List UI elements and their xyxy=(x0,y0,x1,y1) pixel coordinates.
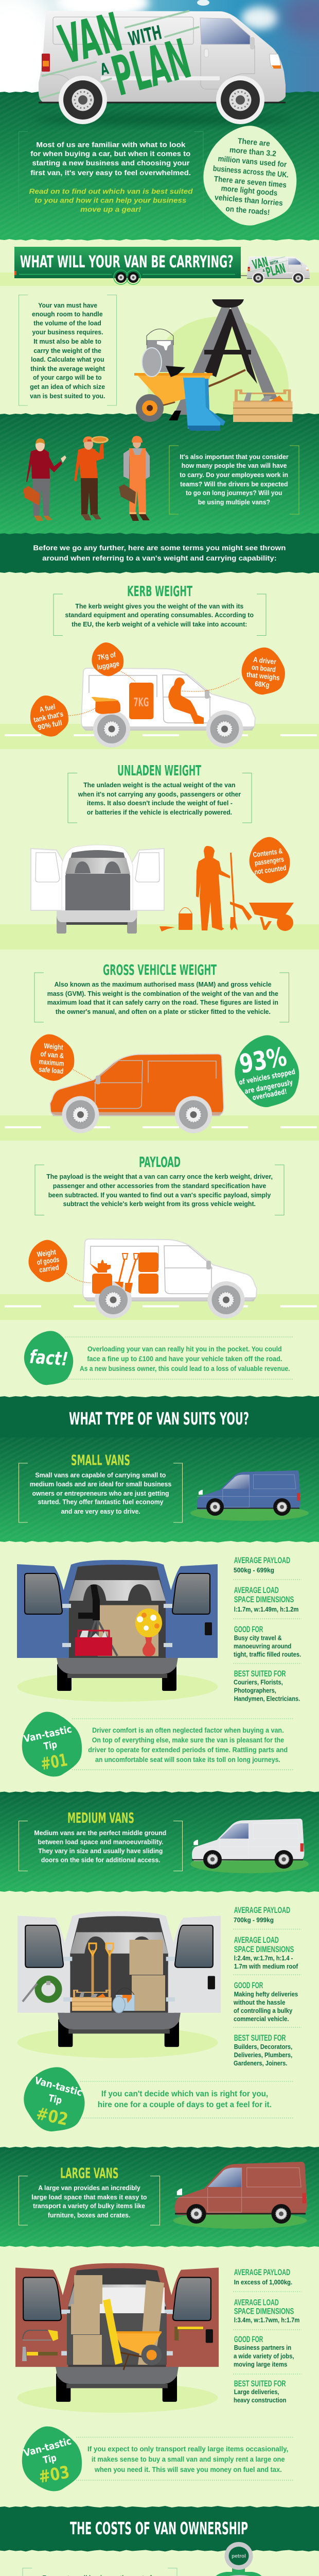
large van specifications: l:3.4m, w:1.7wm, h:1.7m xyxy=(234,2317,299,2324)
small van specifications: Busy city travel & xyxy=(234,1634,282,1641)
red van side view xyxy=(173,2162,307,2229)
intro text block: for when buying a car, but when it comes to xyxy=(30,150,191,158)
wheelbarrow xyxy=(134,370,245,422)
dotted leader lines xyxy=(68,671,136,716)
badge: goods carried: carried xyxy=(39,1263,60,1274)
medium van specifications: of controlling a bulky xyxy=(234,2007,292,2014)
road xyxy=(0,1115,319,1141)
background circle behind tools xyxy=(148,317,289,458)
title: van with a plan: PLAN xyxy=(106,27,197,108)
fact callout: Overloading your van can really hit you in the pocket. You could xyxy=(87,1345,282,1353)
badge: weight of van: maximum xyxy=(39,1057,64,1067)
cardboard boxes xyxy=(130,1940,165,2011)
large van specifications: GOOD FOR xyxy=(234,2334,263,2344)
large van specifications: SPACE DIMENSIONS xyxy=(234,2307,294,2316)
badge: 93 percent: overloaded! xyxy=(252,1088,288,1102)
badge: contents not counted: passengers xyxy=(254,855,285,867)
small branded van: VAN xyxy=(251,255,270,273)
panel: hero xyxy=(0,0,319,241)
saw, hammer and set square xyxy=(22,2327,204,2361)
description: doors on the side for additional access. xyxy=(41,1856,161,1864)
small branded van: WITH xyxy=(270,260,279,266)
small vans description: owners or entrepreneurs who are just getting xyxy=(32,1489,169,1497)
large van specifications: heavy construction xyxy=(234,2397,286,2404)
small van specifications: Photographers, xyxy=(234,1687,276,1694)
small vans description: Small vans are capable of carrying small to xyxy=(35,1471,166,1479)
road xyxy=(0,924,319,950)
badge: weight of van xyxy=(28,1032,76,1083)
badge: goods carried xyxy=(26,1238,70,1284)
dotted leader line xyxy=(73,1070,92,1080)
small van specifications: BEST SUITED FOR xyxy=(234,1669,286,1679)
text block: volume and weight: the volume of the load xyxy=(33,319,101,327)
red toolbox xyxy=(75,1631,112,1656)
badge: driver xyxy=(237,642,291,700)
medium van rear view with contents xyxy=(17,1911,221,2058)
toolbox xyxy=(233,390,292,422)
tip 01: driver to operate for extended periods of time. Rattling parts and xyxy=(88,1745,288,1754)
title: van with a plan: WITH xyxy=(126,21,164,50)
badge: fuel tank: A fuel xyxy=(39,702,56,714)
tip 02: Van-tastic xyxy=(33,2075,83,2098)
cardboard boxes xyxy=(71,2275,164,2365)
badge: luggage: 7Kg of xyxy=(97,650,116,662)
definition text: or batteries if the vehicle is electrically powered. xyxy=(87,808,232,816)
orange van xyxy=(50,1054,224,1133)
small van specifications: l:1.7m, w:1.49m, h:1.2m xyxy=(234,1606,298,1613)
tip 01: On top of everything else, make sure the van is pleasant for the xyxy=(92,1736,284,1744)
road xyxy=(0,1294,319,1320)
flowers in vase xyxy=(135,1608,162,1656)
trailer heading xyxy=(14,247,247,284)
person: builder xyxy=(119,436,150,521)
definition text: Also known as the maximum authorised mass (MAM) and gross vehicle xyxy=(55,980,271,988)
definition text: maximum load that it can safely carry on the road. These figures are listed in xyxy=(47,998,278,1006)
small van specifications: GOOD FOR xyxy=(234,1624,263,1634)
title: van with a plan xyxy=(54,1,197,108)
text block: how many people: to go on long journeys? Will you xyxy=(186,489,282,497)
toolbox xyxy=(72,1990,112,2011)
fact callout: As a new business owner, this could lead to a loss of valuable revenue. xyxy=(80,1364,290,1372)
tip 02: Tip xyxy=(47,2093,63,2107)
orange silhouette: labourer and tools xyxy=(160,846,294,931)
paint tin xyxy=(142,329,185,377)
fact callout xyxy=(17,1324,294,1393)
small van rear view with contents xyxy=(0,1555,319,2576)
callout: 3.2 million vans: on the roads! xyxy=(225,205,270,217)
text block: volume and weight: of your cargo will be to xyxy=(33,374,102,381)
wheelbarrow xyxy=(115,2331,162,2370)
description: between load space and manoeuvrability. xyxy=(38,1838,164,1846)
medium van specifications: Gardeners, Joiners. xyxy=(234,2060,287,2067)
road xyxy=(0,724,319,749)
person: businessman xyxy=(23,438,66,521)
text block: how many people: teams? Will the drivers be expected xyxy=(180,480,288,488)
badge: weight of van: safe load xyxy=(39,1065,64,1075)
tip 01: Driver comfort is an often neglected factor when buying a van. xyxy=(92,1726,284,1734)
callout: 3.2 million vans: business across the UK. xyxy=(212,164,289,179)
tip 03: Van-tastic xyxy=(23,2435,73,2459)
text block: how many people: It's also important that you consider xyxy=(180,453,289,461)
small van specifications: SPACE DIMENSIONS xyxy=(234,1595,294,1604)
white van with goods xyxy=(83,1239,257,1318)
tip 02: #02 xyxy=(34,2103,70,2129)
green panel xyxy=(0,1396,319,1543)
medium van specifications: l:2.4m, w:1.7m, h:1.4 - xyxy=(234,1955,293,1962)
tip 01 xyxy=(20,1709,294,1780)
callout: 3.2 million vans: There are xyxy=(237,137,271,148)
definition text: the EU, the kerb weight of a vehicle will take into account: xyxy=(72,620,247,628)
panel: the costs of van ownership xyxy=(0,2506,319,2576)
medium van specifications: BEST SUITED FOR xyxy=(234,2033,286,2043)
paint tin and lid xyxy=(113,1988,134,2013)
medium van specifications: commercial vehicle. xyxy=(234,2015,289,2023)
white van with loads: 7KG xyxy=(134,696,149,709)
medium van specifications: AVERAGE LOAD xyxy=(234,1935,279,1945)
definition text: items. It also doesn't include the weight of fuel - xyxy=(87,799,233,807)
intro text block: Most of us are familiar with what to look xyxy=(36,141,186,149)
definition text xyxy=(54,594,266,636)
definition text xyxy=(68,773,252,823)
badge: 93 percent: of vehicles stopped xyxy=(238,1068,296,1087)
definition text: when it's not carrying any goods, passengers or other xyxy=(78,790,241,798)
text block: volume and weight: Your van must have xyxy=(38,301,97,309)
badge: 93 percent: are dangerously xyxy=(244,1078,293,1096)
camera on tripod xyxy=(78,1585,117,1656)
description: furniture, boxes and crates. xyxy=(48,2211,130,2219)
panel: employees xyxy=(0,413,319,535)
badge: goods carried: Weight xyxy=(37,1248,57,1259)
large van specifications: In excess of 1,000kg. xyxy=(234,2279,292,2286)
callout: 3.2 million vans: There are seven times xyxy=(214,175,287,190)
text block: how many people: be using multiple vans? xyxy=(198,498,270,506)
badge: fuel tank: 90% full xyxy=(37,718,63,732)
dotted leader line xyxy=(67,1273,92,1283)
small vans description: medium loads and are ideal for small business xyxy=(30,1480,171,1488)
panel: unladen weight xyxy=(0,762,319,950)
medium van specifications: 1.7m with medium roof xyxy=(234,1963,298,1970)
definition text: mass (GVM). This weight is the combination of the weight of the van and the xyxy=(47,990,278,997)
tip 03: #03 xyxy=(37,2462,71,2487)
hero van illustration xyxy=(39,11,286,124)
heading: UNLADEN WEIGHT xyxy=(117,762,201,779)
medium van specifications: GOOD FOR xyxy=(234,1980,263,1990)
definition text: passenger and other accessories from the standard specification have xyxy=(53,1182,266,1190)
small van specifications: Handymen, Electricians. xyxy=(234,1696,300,1703)
tip 03: Tip xyxy=(42,2452,58,2466)
petrol pump: petrol xyxy=(232,2553,246,2560)
tip 02: hire one for a couple of days to get a feel for it. xyxy=(98,2100,272,2109)
medium van specifications: AVERAGE PAYLOAD xyxy=(234,1905,290,1915)
small branded van: A xyxy=(262,268,265,273)
costs bullet list xyxy=(23,2568,177,2576)
heading: KERB WEIGHT xyxy=(127,583,192,600)
hose xyxy=(23,1979,59,2002)
small vans description xyxy=(19,1463,182,1522)
green hero panel xyxy=(0,91,319,241)
shovels xyxy=(89,1943,113,1996)
definition text: subtract the vehicle's kerb weight from its gross vehicle weight. xyxy=(63,1200,256,1208)
text block: how many people: to carry. Do your employees work in xyxy=(180,471,288,479)
description: A large van provides an incredibly xyxy=(38,2184,141,2192)
description: They vary in size and usually have sliding xyxy=(38,1847,163,1855)
tip 01: Tip xyxy=(43,1739,58,1752)
dark band: terms intro xyxy=(0,533,319,573)
small van specifications xyxy=(234,1555,302,1703)
spirit level xyxy=(103,2299,122,2365)
tip 03: when you need it. This will save you money on fuel and tax. xyxy=(94,2465,282,2473)
large van specifications: moving large items xyxy=(234,2361,287,2368)
petrol pump xyxy=(197,2542,296,2576)
heading: PAYLOAD xyxy=(139,1154,181,1171)
callout: 3.2 million vans: more than 3.2 xyxy=(229,146,276,158)
tip 02 xyxy=(15,2059,294,2141)
blue van side view xyxy=(190,1470,309,1521)
medium van specifications: SPACE DIMENSIONS xyxy=(234,1944,294,1954)
small van specifications: AVERAGE PAYLOAD xyxy=(234,1555,290,1565)
medium van specifications: Making hefty deliveries xyxy=(234,1991,298,1998)
medium van specifications: Deliveries, Plumbers, xyxy=(234,2052,292,2059)
text block: how many people xyxy=(169,446,299,514)
panel: kerb weight xyxy=(0,583,319,749)
definition text: The unladen weight is the actual weight of the van xyxy=(83,781,236,789)
text block: volume and weight: enough room to handle xyxy=(32,310,103,318)
green panel xyxy=(0,413,319,535)
tip 01: #01 xyxy=(39,1750,69,1774)
large van specifications: Large deliveries, xyxy=(234,2388,279,2396)
white van with loads xyxy=(81,668,255,748)
medium van specifications xyxy=(233,1905,302,2067)
small branded van xyxy=(247,255,310,284)
large van specifications: BEST SUITED FOR xyxy=(234,2379,286,2388)
description: large load space that makes it easy to xyxy=(31,2193,147,2201)
description: Medium vans are the perfect middle ground xyxy=(34,1829,166,1837)
wellington boots xyxy=(183,378,225,431)
text block: how many people: how many people the van will have xyxy=(182,462,287,469)
description xyxy=(19,1821,182,1871)
small branded van: PLAN xyxy=(264,261,287,280)
intro text block: starting a new business and choosing your xyxy=(32,159,190,167)
tip 03: If you expect to only transport really large items occasionally, xyxy=(87,2445,288,2453)
badge: goods carried: of goods xyxy=(37,1255,60,1266)
empty van rear view xyxy=(31,845,164,934)
text block: volume and weight: think the average weight xyxy=(30,365,105,372)
tip 03 xyxy=(20,2424,294,2494)
definition text: the owner's manual, and often on a plate or sticker fitted to the vehicle. xyxy=(56,1008,271,1015)
badge: weight of van: of van & xyxy=(40,1049,64,1060)
badge: driver: that weighs xyxy=(246,670,280,682)
badge: weight of van: Weight xyxy=(44,1041,63,1052)
badge: 93 percent: 93% xyxy=(237,1042,289,1079)
badge: contents not counted xyxy=(247,834,293,886)
medium van specifications: without the hassle xyxy=(233,1999,285,2006)
tip 03: it makes sense to buy a small van and simply rent a large one xyxy=(92,2455,285,2463)
badge: luggage xyxy=(92,642,123,676)
small van specifications: AVERAGE LOAD xyxy=(234,1585,279,1595)
text block: volume and weight: your business requires. xyxy=(32,328,103,336)
tip 02: If you can't decide which van is right for you, xyxy=(101,2090,268,2098)
tools illustration xyxy=(134,299,292,431)
description xyxy=(19,2176,160,2225)
medium van specifications: 700kg - 999kg xyxy=(234,1917,274,1924)
panel: gross vehicle weight xyxy=(0,962,319,1141)
intro text block: move up a gear! xyxy=(80,206,141,214)
intro text block: to you and how it can help your business xyxy=(34,197,186,205)
large van rear view with contents xyxy=(15,2263,219,2413)
badge: driver: 68Kg xyxy=(255,680,270,689)
callout: 3.2 million vans: more light goods xyxy=(221,184,278,198)
badge: driver: on board xyxy=(251,663,276,673)
callout: 3.2 million vans: million vans used for xyxy=(218,155,287,169)
badge: fuel tank xyxy=(27,692,71,740)
definition text: standard equipment and operating consumables. According to xyxy=(65,611,254,619)
panel: what type of van suits you, small vans xyxy=(0,1396,319,1543)
green panel xyxy=(0,1791,319,1892)
tip 01: an uncomfortable seat will soon take its toll on long journeys. xyxy=(95,1755,280,1764)
white van side view xyxy=(190,1819,309,1873)
ladder xyxy=(169,299,278,420)
medium van specifications: Builders, Decorators, xyxy=(234,2043,292,2050)
callout: 3.2 million vans xyxy=(196,118,305,233)
panel: what will your van be carrying banner xyxy=(0,247,319,286)
dark band: terms intro: around when referring to a van's weight and carrying capability: xyxy=(42,554,277,563)
large van specifications: AVERAGE PAYLOAD xyxy=(234,2267,290,2277)
panel: medium vans xyxy=(0,1791,319,1892)
person: pizza courier xyxy=(74,436,109,520)
green panel xyxy=(0,2146,319,2247)
ground strip xyxy=(0,273,319,286)
panel: large vans xyxy=(0,2146,319,2247)
small vans description: started. They offer fantastic fuel economy xyxy=(38,1498,164,1505)
small vans heading: SMALL VANS xyxy=(71,1452,130,1469)
text block: volume and weight: load. Calculate what you xyxy=(31,355,104,363)
large van specifications: a wide variety of jobs, xyxy=(234,2352,294,2360)
definition text xyxy=(34,973,289,1022)
small van specifications: Couriers, Florists, xyxy=(234,1679,283,1686)
badge: contents not counted: not counted xyxy=(254,863,287,876)
panel: payload xyxy=(0,1154,319,1393)
text block: volume and weight: It must also be able to xyxy=(33,337,101,345)
definition text: The payload is the weight that a van can carry once the kerb weight, driver, xyxy=(46,1173,273,1180)
definition text: been subtracted. If you wanted to find out a van's specific payload, simply xyxy=(48,1191,271,1199)
badge: fuel tank: tank that's xyxy=(33,709,64,724)
small van specifications: 500kg - 699kg xyxy=(234,1567,274,1574)
large van specifications: Business partners in xyxy=(234,2344,291,2351)
intro text block: Read on to find out which van is best suited xyxy=(29,188,193,196)
badge: luggage: luggage xyxy=(96,659,120,671)
text block: volume and weight: van is best suited to you. xyxy=(30,392,105,400)
tip 01: Van-tastic xyxy=(23,1723,73,1745)
cardboard box xyxy=(98,1605,158,1656)
title: van with a plan: A xyxy=(99,59,110,79)
heading band xyxy=(0,2506,319,2551)
small van specifications: tight, traffic filled routes. xyxy=(234,1651,301,1658)
badge: contents not counted: Contents & xyxy=(252,846,283,859)
small vans description: and are very easy to drive. xyxy=(61,1507,140,1515)
badge: driver: A driver xyxy=(253,655,277,666)
definition text: The kerb weight gives you the weight of the van with its xyxy=(75,602,243,610)
sky background xyxy=(0,0,319,108)
intro text block xyxy=(19,132,203,222)
heading: LARGE VANS xyxy=(60,2165,118,2181)
fact callout: face a fine up to £100 and have your vehicle taken off the road. xyxy=(87,1354,282,1363)
dark band: terms intro: Before we go any further, here are some terms you might see thrown xyxy=(33,544,286,552)
text block: volume and weight: carry the weight of the xyxy=(33,347,101,354)
text block: volume and weight xyxy=(19,295,116,405)
fact callout: fact! xyxy=(29,1346,69,1370)
definition text xyxy=(35,1165,284,1215)
badge: 93 percent xyxy=(229,1029,306,1113)
text block: volume and weight: get an idea of which size xyxy=(30,383,105,391)
callout: 3.2 million vans: vehicles than lorries xyxy=(214,193,283,208)
heading: GROSS VEHICLE WEIGHT xyxy=(103,962,217,978)
large van specifications xyxy=(234,2267,302,2404)
large van specifications: AVERAGE LOAD xyxy=(234,2297,279,2307)
intro text block: first van, it's very easy to feel overwhelmed. xyxy=(30,169,191,177)
description: transport a variety of bulky items like xyxy=(33,2202,145,2210)
heading: MEDIUM VANS xyxy=(67,1810,134,1826)
small van specifications: manoeuvring around xyxy=(234,1643,291,1650)
